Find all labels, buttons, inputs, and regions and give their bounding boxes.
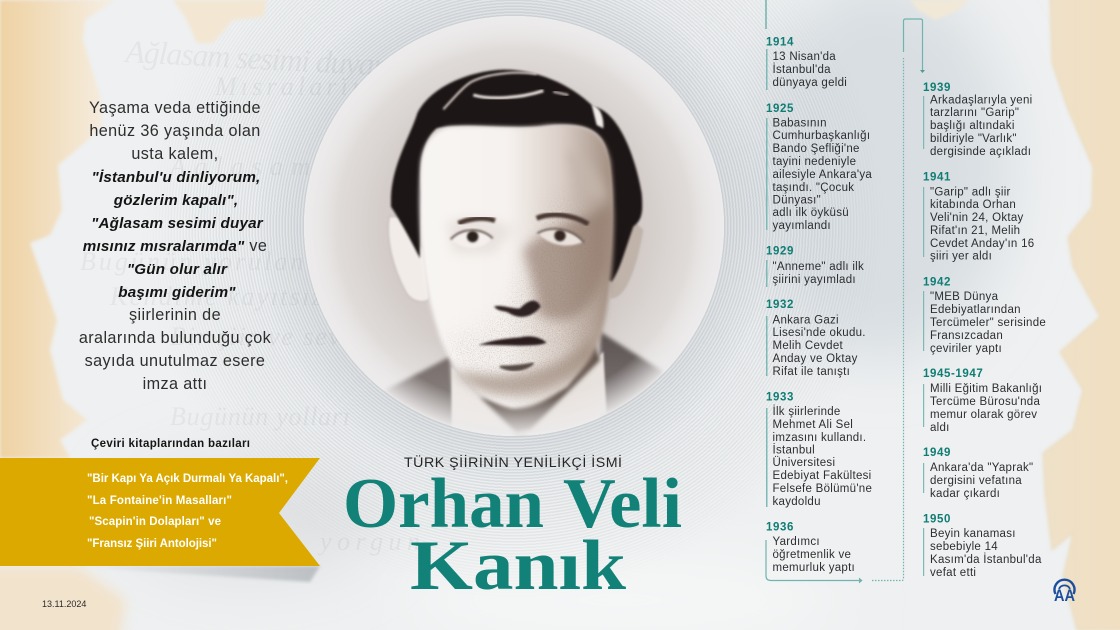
entry 1925: ailesiyle Ankara'ya <box>772 169 872 181</box>
nose <box>494 301 541 317</box>
left paragraph: "Gün olur alır <box>127 261 228 278</box>
entry 1929: "Anneme" adlı ilk <box>772 261 864 273</box>
entry 1941: Rifat'ın 21, Melih <box>930 225 1020 237</box>
handwriting background: Bir şiir ve sevda <box>170 322 370 351</box>
title: Orhan <box>343 465 544 543</box>
entry 1933: İstanbul <box>772 444 815 456</box>
entry 1936: Yardımcı <box>772 536 820 548</box>
left paragraph: "Ağlasam sesimi duyar <box>91 215 264 232</box>
entry 1933: 1933 <box>766 392 794 404</box>
entry 1941: "Garip" adlı şiir <box>930 186 1011 198</box>
handwriting background: Kendime kayıtsız hayat <box>109 282 401 311</box>
timeline column two <box>923 82 1046 579</box>
entry 1939: dergisinde açıkladı <box>930 146 1031 158</box>
entry 1939: tarzlarını "Garip" <box>930 107 1019 119</box>
entry 1914: dünyaya geldi <box>772 77 847 89</box>
entry 1949: 1949 <box>923 447 951 459</box>
ribbon: translated books: "Fransız Şiiri Antolojisi" <box>87 538 217 550</box>
left paragraph: şiirlerinin de <box>129 306 221 324</box>
left paragraph: başımı giderim" <box>118 284 236 301</box>
ribbon: translated books <box>0 458 320 566</box>
entry 1932: Anday ve Oktay <box>772 353 858 365</box>
entry 1932: Melih Cevdet <box>772 340 843 352</box>
entry 1939: Arkadaşlarıyla yeni <box>930 94 1032 106</box>
entry 1950: 1950 <box>923 514 951 526</box>
entry 1941: Veli'nin 24, Oktay <box>930 212 1024 224</box>
entry 1949: Ankara'da "Yaprak" <box>930 462 1033 474</box>
entry 1925: 1925 <box>766 103 794 115</box>
entry 1929: 1929 <box>766 246 794 258</box>
entry 1933: Üniversitesi <box>772 457 835 469</box>
entry 1950: Beyin kanaması <box>930 528 1016 540</box>
handwriting background <box>80 33 477 556</box>
face grain <box>442 196 600 406</box>
entry 1932: Lisesi'nde okudu. <box>772 327 866 339</box>
entry 1941: 1941 <box>923 172 951 184</box>
entry 1914 <box>766 36 847 90</box>
entry 1945-1947: aldı <box>930 422 950 434</box>
handwriting background: Bugünün yorulan kalem <box>80 247 390 276</box>
subtitle: TÜRK ŞİİRİNİN YENİLİKÇİ İSMİ <box>404 453 622 471</box>
title <box>343 465 682 605</box>
entry 1933: Mehmet Ali Sel <box>772 419 853 431</box>
portrait circle <box>300 15 730 450</box>
shirt <box>450 367 482 428</box>
entry 1933: Edebiyat Fakültesi <box>772 470 872 482</box>
entry 1936: öğretmenlik ve <box>772 549 851 561</box>
entry 1925: Cumhurbaşkanlığı <box>772 130 870 142</box>
ribbon: translated books: "Bir Kapı Ya Açık Durmalı Ya Kapalı", <box>87 473 288 485</box>
ribbon shadow <box>60 566 320 582</box>
face <box>419 125 614 408</box>
timeline column one <box>766 36 872 574</box>
entry 1950 <box>923 514 1042 579</box>
entry 1929: şiirini yayımladı <box>772 274 856 286</box>
entry 1942: Fransızcadan <box>930 330 1003 342</box>
left paragraph: henüz 36 yaşında olan <box>89 122 261 140</box>
entry 1925: tayini nedeniyle <box>772 156 856 168</box>
entry 1936: memurluk yaptı <box>772 562 855 574</box>
title: Veli <box>563 465 682 543</box>
face shading <box>523 207 610 320</box>
handwriting background: Ağlasam <box>168 152 310 181</box>
entry 1925: Babasının <box>772 118 827 130</box>
handwriting background: yorgun <box>317 527 420 556</box>
entry 1932 <box>766 299 866 378</box>
timeline connector arrows <box>766 0 925 583</box>
portrait edge vignette <box>316 63 666 436</box>
handwriting background: Ağlasam sesimi duyar mısınız <box>123 33 477 87</box>
translated books heading: Çeviri kitaplarından bazıları <box>91 438 250 450</box>
eyebrows <box>458 218 495 223</box>
ribbon: translated books: "Scapin'in Dolapları" ve <box>89 516 221 528</box>
entry 1925: Bando Şefliği'ne <box>772 143 860 155</box>
entry 1950: Kasım'da İstanbul'da <box>930 553 1042 566</box>
entry 1945-1947: Milli Eğitim Bakanlığı <box>930 383 1042 395</box>
entry 1933: kaydoldu <box>772 496 821 508</box>
entry 1925 <box>766 103 872 232</box>
entry 1945-1947: 1945-1947 <box>923 368 983 380</box>
portrait photo <box>383 68 664 436</box>
icon: AA logo <box>1054 580 1075 605</box>
entry 1933 <box>766 392 872 508</box>
entry 1949 <box>923 447 1033 500</box>
entry 1932: Rifat ile tanıştı <box>772 366 850 378</box>
entry 1945-1947: Tercüme Bürosu'nda <box>930 396 1040 408</box>
suit <box>383 356 454 428</box>
entry 1945-1947: memur olarak görev <box>930 409 1037 421</box>
left paragraph <box>79 99 272 393</box>
left paragraph: imza attı <box>143 375 207 393</box>
entry 1941: kitabında Orhan <box>930 199 1016 211</box>
left paragraph: mısınız mısralarımda" ve <box>83 237 267 255</box>
icon: AA logo: AA <box>1054 586 1075 605</box>
entry 1925: adlı ilk öyküsü <box>772 207 849 219</box>
entry 1942: 1942 <box>923 276 951 288</box>
entry 1933: İlk şiirlerinde <box>772 405 841 418</box>
left paragraph: Yaşama veda ettiğinde <box>89 99 261 117</box>
entry 1936 <box>766 522 855 574</box>
left paragraph: "İstanbul'u dinliyorum, <box>92 169 260 186</box>
entry 1941: Cevdet Anday'ın 16 <box>930 238 1034 250</box>
entry 1939: başlığı altındaki <box>930 120 1015 132</box>
entry 1939 <box>923 82 1032 158</box>
entry 1950: vefat etti <box>930 567 976 579</box>
tie <box>516 436 526 437</box>
entry 1941 <box>923 172 1034 262</box>
entry 1950: sebebiyle 14 <box>930 541 998 553</box>
concentric line rings <box>180 0 836 562</box>
entry 1929 <box>766 246 864 287</box>
left paragraph: gözlerim kapalı", <box>113 192 238 209</box>
ears <box>388 217 429 302</box>
neck shadow <box>480 343 600 433</box>
entry 1942: Tercümeler" serisinde <box>930 317 1046 329</box>
entry 1914: İstanbul'da <box>772 63 831 76</box>
entry 1949: kadar çıkardı <box>930 488 1000 500</box>
entry 1939: bildiriyle "Varlık" <box>930 133 1017 145</box>
handwriting background: Mısralarımda <box>214 72 405 101</box>
title: Kanık <box>410 527 627 605</box>
left paragraph: usta kalem, <box>131 145 219 163</box>
entry 1941: şiiri yer aldı <box>930 250 992 262</box>
entry 1942: "MEB Dünya <box>930 291 999 303</box>
background: right tan paper stain <box>1043 0 1120 630</box>
entry 1914: 1914 <box>766 36 794 48</box>
portrait bottom fade <box>399 356 643 431</box>
entry 1914: 13 Nisan'da <box>772 51 836 63</box>
entry 1942: Edebiyatlarından <box>930 304 1021 316</box>
entry 1942 <box>923 276 1046 355</box>
entry 1942: çeviriler yaptı <box>930 343 1002 355</box>
left paragraph: sayıda unutulmaz esere <box>85 352 265 370</box>
hair highlights <box>443 73 537 109</box>
entry 1932: 1932 <box>766 299 794 311</box>
entry 1936: 1936 <box>766 522 794 534</box>
ribbon: translated books: "La Fontaine'in Masalları" <box>87 495 232 507</box>
entry 1925: taşındı. "Çocuk <box>772 182 854 194</box>
hair <box>391 70 642 282</box>
entry 1945-1947 <box>923 368 1042 434</box>
entry 1933: Felsefe Bölümü'ne <box>772 483 872 495</box>
eyes <box>454 232 490 247</box>
entry 1939: 1939 <box>923 82 951 94</box>
entry 1933: imzasını kullandı. <box>772 432 866 444</box>
entry 1949: dergisini vefatına <box>930 475 1022 487</box>
entry 1932: Ankara Gazi <box>772 314 839 326</box>
mouth <box>478 336 547 346</box>
entry 1925: Dünyası" <box>772 194 821 206</box>
left paragraph: aralarında bulunduğu çok <box>79 329 272 347</box>
entry 1925: yayımlandı <box>772 220 831 232</box>
date: 13.11.2024 <box>42 599 86 609</box>
handwriting background: Bugünün yolları <box>170 402 350 431</box>
